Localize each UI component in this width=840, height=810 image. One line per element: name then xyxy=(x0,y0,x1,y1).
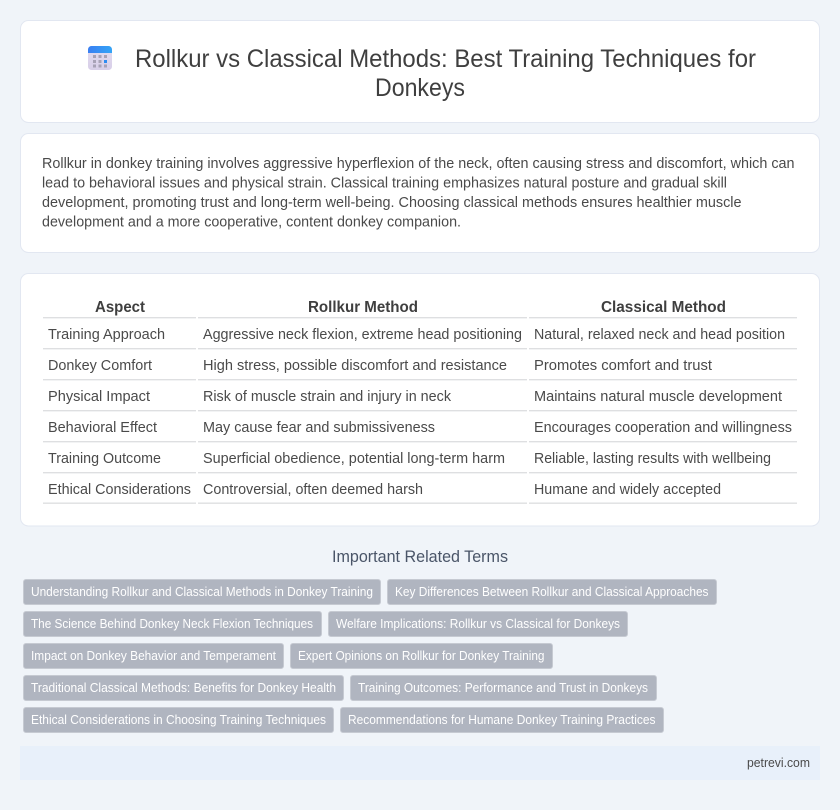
heading: important related terms: Important Related Terms xyxy=(332,548,508,566)
table row: training outcome: Training Outcome xyxy=(48,450,161,467)
panel: introduction xyxy=(20,134,820,252)
tag xyxy=(24,580,380,604)
icon: calendar xyxy=(88,46,112,70)
table row: training outcome xyxy=(48,450,771,467)
tag: Understanding Rollkur and Classical Methods in Donkey Training xyxy=(31,585,373,599)
tag xyxy=(24,644,284,668)
table row: training outcome: Superficial obedience, potential long-term harm xyxy=(203,450,505,467)
table row: donkey comfort: High stress, possible discomfort and resistance xyxy=(203,357,507,374)
table row: physical impact: Risk of muscle strain and injury in neck xyxy=(203,388,451,405)
text block: introduction paragraph: development and a more cooperative, content donkey companion. xyxy=(42,214,461,230)
table row: ethical considerations: Ethical Considerations xyxy=(48,481,191,498)
text block: introduction paragraph: Rollkur in donkey training involves aggressive hyperflexion of the neck, often causing stress and discomfort, which can xyxy=(42,155,794,172)
table row: training approach: Training Approach xyxy=(48,326,165,343)
panel: comparison table xyxy=(20,274,820,526)
related term tags xyxy=(24,580,716,732)
table row: ethical considerations xyxy=(48,481,721,498)
table row: donkey comfort xyxy=(48,357,713,374)
table row: donkey comfort: Donkey Comfort xyxy=(48,357,153,374)
title: Rollkur vs Classical Methods: Best Training Techniques for xyxy=(135,45,756,73)
tag xyxy=(328,612,628,636)
tag: Key Differences Between Rollkur and Classical Approaches xyxy=(395,585,708,599)
table row: training approach: Aggressive neck flexion, extreme head positioning xyxy=(203,326,522,343)
tag xyxy=(340,708,664,732)
table row: training approach: Natural, relaxed neck and head position xyxy=(534,326,785,343)
footer xyxy=(20,746,820,780)
table header: Aspect xyxy=(95,299,146,316)
table header: Rollkur Method xyxy=(308,299,418,316)
tag: Expert Opinions on Rollkur for Donkey Training xyxy=(298,649,545,663)
footer: petrevi.com xyxy=(747,755,810,770)
table row: behavioral effect xyxy=(48,419,792,436)
table row: behavioral effect: May cause fear and submissiveness xyxy=(203,419,435,436)
table header xyxy=(95,299,726,316)
tag: Recommendations for Humane Donkey Training Practices xyxy=(348,713,656,727)
tag xyxy=(24,676,344,700)
text block: introduction paragraph: lead to behavioral issues and physical strain. Classical training emphasizes natural posture and gradual skill xyxy=(42,174,727,192)
table row: donkey comfort: Promotes comfort and trust xyxy=(534,357,713,374)
tag xyxy=(24,708,334,732)
tag: Ethical Considerations in Choosing Training Techniques xyxy=(31,713,326,727)
table row: physical impact xyxy=(48,388,783,405)
tag xyxy=(388,580,716,604)
table header: Classical Method xyxy=(601,299,726,316)
title xyxy=(135,45,756,102)
table row: ethical considerations: Humane and widely accepted xyxy=(534,481,721,498)
text block: introduction paragraph: development, promoting trust and long-term well-being. Choosing classical methods ensures healthier muscle xyxy=(42,194,742,211)
table row: training approach xyxy=(48,326,785,343)
table row: physical impact: Maintains natural muscle development xyxy=(534,388,783,405)
tag: Training Outcomes: Performance and Trust in Donkeys xyxy=(358,681,648,695)
tag: Impact on Donkey Behavior and Temperament xyxy=(31,649,276,663)
table row: behavioral effect: Behavioral Effect xyxy=(48,419,158,436)
tag xyxy=(24,612,322,636)
table row: ethical considerations: Controversial, often deemed harsh xyxy=(203,481,423,498)
text block: introduction paragraph xyxy=(42,155,794,230)
tag xyxy=(290,644,552,668)
tag: Welfare Implications: Rollkur vs Classical for Donkeys xyxy=(336,617,620,631)
tag: The Science Behind Donkey Neck Flexion Techniques xyxy=(31,617,313,631)
table row: behavioral effect: Encourages cooperation and willingness xyxy=(534,419,792,436)
panel: header xyxy=(20,20,820,122)
table row: physical impact: Physical Impact xyxy=(48,388,151,405)
tag: Traditional Classical Methods: Benefits for Donkey Health xyxy=(31,681,336,695)
table row: training outcome: Reliable, lasting results with wellbeing xyxy=(534,450,771,467)
title: Donkeys xyxy=(375,74,465,102)
tag xyxy=(350,676,656,700)
